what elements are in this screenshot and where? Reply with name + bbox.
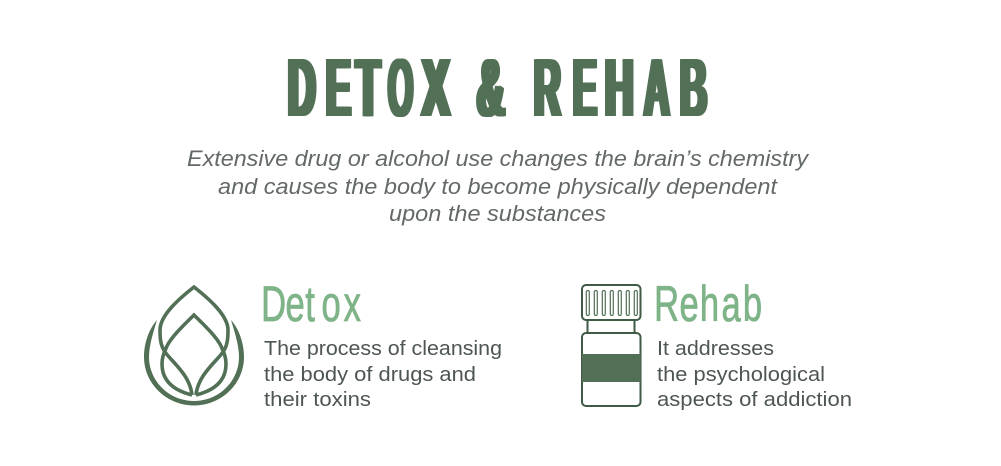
text block: Detox description: their toxins — [264, 389, 371, 411]
icon: pill bottle — [582, 285, 640, 406]
title: A — [644, 42, 670, 134]
intro text block — [187, 146, 810, 226]
text block: Rehab description: It addresses — [657, 338, 774, 360]
title: R — [534, 42, 561, 134]
heading: Rehab: Rehab — [654, 277, 762, 333]
text block: Rehab description: the psychological — [657, 364, 825, 386]
title: E — [326, 42, 351, 134]
title: & — [477, 42, 505, 134]
intro text block: Extensive drug or alcohol use changes the brain’s chemistry — [187, 146, 810, 171]
text block: Detox description — [264, 338, 502, 411]
heading: Detox: Detox — [261, 277, 361, 333]
intro text block: upon the substances — [389, 201, 606, 226]
text block: Detox description: the body of drugs and — [264, 364, 476, 386]
intro text block: and causes the body to become physically dependent — [218, 174, 778, 199]
text block: Rehab description — [657, 338, 852, 411]
title: O — [388, 42, 413, 134]
title: E — [573, 42, 597, 134]
title — [288, 42, 708, 134]
title: D — [288, 42, 316, 134]
title: X — [422, 42, 449, 134]
text block: Detox description: The process of cleansing — [264, 338, 502, 360]
icon: lotus leaf drop — [144, 287, 244, 406]
text block: Rehab description: aspects of addiction — [657, 389, 852, 411]
title: T — [356, 42, 380, 134]
title: B — [680, 42, 707, 134]
title: H — [605, 42, 633, 134]
